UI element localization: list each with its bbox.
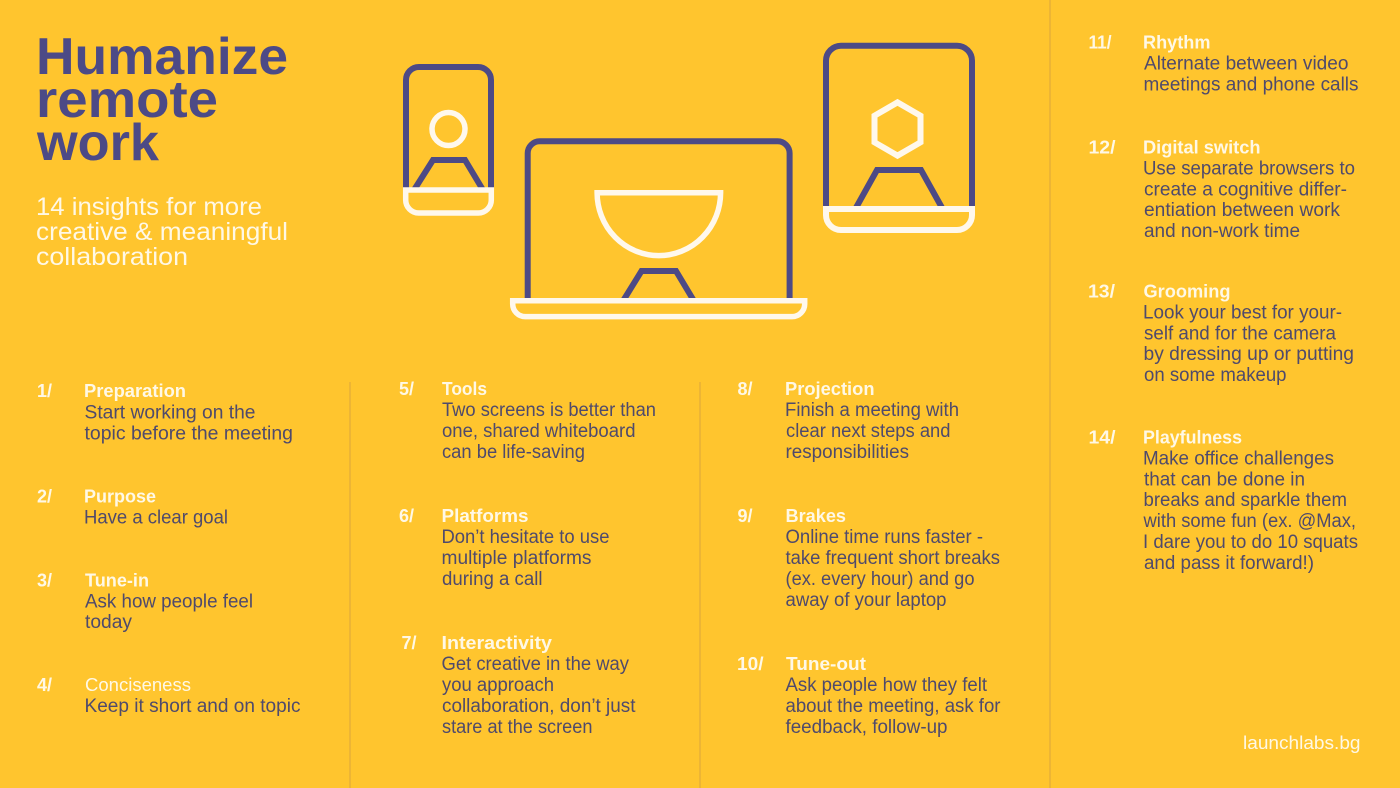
insight 9: [738, 506, 1000, 611]
insight 7: Get creative in the way: [442, 654, 629, 675]
insight 3: Ask how people feel: [85, 592, 253, 612]
insight 12: and non-work time: [1144, 221, 1300, 242]
insight 14: I dare you to do 10 squats: [1143, 532, 1358, 553]
insight 8: 8/: [738, 379, 753, 399]
insight 8: Finish a meeting with: [785, 400, 959, 421]
insight 5: can be life-saving: [442, 442, 585, 463]
insight 14: that can be done in: [1144, 470, 1305, 490]
insight 2: Have a clear goal: [84, 508, 228, 528]
insight 10: Ask people how they felt: [786, 675, 988, 696]
insight 9: away of your laptop: [786, 590, 946, 611]
insight 10: feedback, follow-up: [786, 717, 948, 738]
insight 7: collaboration, don’t just: [442, 696, 636, 717]
insight 8: responsibilities: [786, 442, 909, 463]
insight 5: Tools: [442, 379, 487, 399]
insight 6: multiple platforms: [442, 548, 592, 569]
insight 1: 1/: [37, 381, 52, 401]
insight 6: during a call: [442, 569, 542, 590]
insight 10: Tune-out: [786, 654, 866, 674]
insight 13: Look your best for your-: [1143, 302, 1342, 324]
insight 14: Playfulness: [1143, 428, 1242, 448]
insight 9: 9/: [738, 506, 753, 526]
website credit: launchlabs.bg: [1243, 732, 1360, 753]
subtitle: creative & meaningful: [36, 218, 288, 246]
insight 13: Grooming: [1144, 282, 1230, 302]
insight 12: entiation between work: [1144, 200, 1341, 221]
insight 14: breaks and sparkle them: [1144, 490, 1347, 511]
insight 10: about the meeting, ask for: [786, 696, 1001, 717]
insight 11: Alternate between video: [1144, 54, 1348, 74]
insight 12: Digital switch: [1143, 138, 1260, 158]
insight 14: 14/: [1088, 428, 1116, 448]
insight 9: take frequent short breaks: [786, 548, 1000, 569]
insight 2: 2/: [37, 486, 52, 506]
insight 2: Purpose: [84, 486, 156, 506]
insight 1: topic before the meeting: [84, 424, 293, 444]
subtitle: collaboration: [36, 243, 188, 271]
insight 1: Start working on the: [84, 402, 256, 424]
icon: phone: [406, 67, 491, 213]
insight 14: [1088, 428, 1358, 574]
insight 4: 4/: [37, 675, 52, 695]
insight 9: (ex. every hour) and go: [786, 569, 974, 590]
insight 14: Make office challenges: [1143, 448, 1334, 470]
insight 1: Preparation: [84, 381, 186, 401]
insight 11: 11/: [1088, 32, 1112, 52]
subtitle: [36, 193, 288, 271]
insight 6: Don’t hesitate to use: [442, 527, 610, 548]
insight 11: Rhythm: [1143, 32, 1210, 52]
insight 8: Projection: [785, 379, 874, 399]
insight 13: [1088, 282, 1354, 386]
insight 7: you approach: [442, 675, 554, 696]
insight 13: on some makeup: [1144, 365, 1286, 386]
insight 5: [399, 379, 656, 463]
insight 3: Tune-in: [85, 570, 149, 590]
insight 12: [1088, 138, 1355, 242]
insight 10: 10/: [737, 654, 764, 674]
insight 6: Platforms: [442, 506, 528, 526]
insight 7: [402, 633, 636, 738]
title: [36, 28, 288, 172]
insight 4: Keep it short and on topic: [84, 696, 300, 717]
insight 12: Use separate browsers to: [1143, 158, 1355, 180]
insight 6: 6/: [399, 506, 414, 526]
insight 4: Conciseness: [85, 674, 191, 695]
insight 9: Online time runs faster -: [786, 527, 983, 548]
icon: tablet: [826, 46, 972, 230]
subtitle: 14 insights for more: [36, 193, 262, 221]
insight 12: 12/: [1088, 138, 1116, 158]
insight 12: create a cognitive differ-: [1144, 180, 1347, 200]
insight 5: 5/: [399, 379, 414, 399]
insight 13: by dressing up or putting: [1144, 344, 1354, 365]
title: remote: [36, 71, 218, 129]
insight 14: and pass it forward!): [1144, 553, 1314, 574]
insight 1: [37, 381, 293, 444]
insight 7: stare at the screen: [442, 717, 592, 738]
insight 9: Brakes: [786, 506, 846, 526]
insight 3: today: [85, 612, 133, 633]
title: work: [36, 114, 159, 172]
insight 3: 3/: [37, 570, 52, 590]
insight 8: clear next steps and: [786, 421, 950, 442]
insight 6: [399, 506, 610, 590]
title: Humanize: [36, 28, 288, 86]
insight 13: self and for the camera: [1144, 324, 1336, 344]
insight 3: [37, 570, 253, 633]
insight 2: [37, 486, 228, 528]
insight 10: [737, 654, 1001, 738]
icon: laptop: [513, 141, 805, 317]
insight 5: Two screens is better than: [442, 400, 656, 421]
insight 7: 7/: [402, 633, 417, 653]
insight 7: Interactivity: [442, 633, 552, 653]
insight 11: meetings and phone calls: [1144, 74, 1358, 96]
insight 11: [1088, 32, 1358, 96]
insight 4: [37, 674, 300, 717]
insight 8: [738, 379, 959, 463]
insight 13: 13/: [1088, 282, 1115, 302]
insight 5: one, shared whiteboard: [442, 421, 636, 442]
insight 14: with some fun (ex. @Max,: [1143, 511, 1356, 532]
